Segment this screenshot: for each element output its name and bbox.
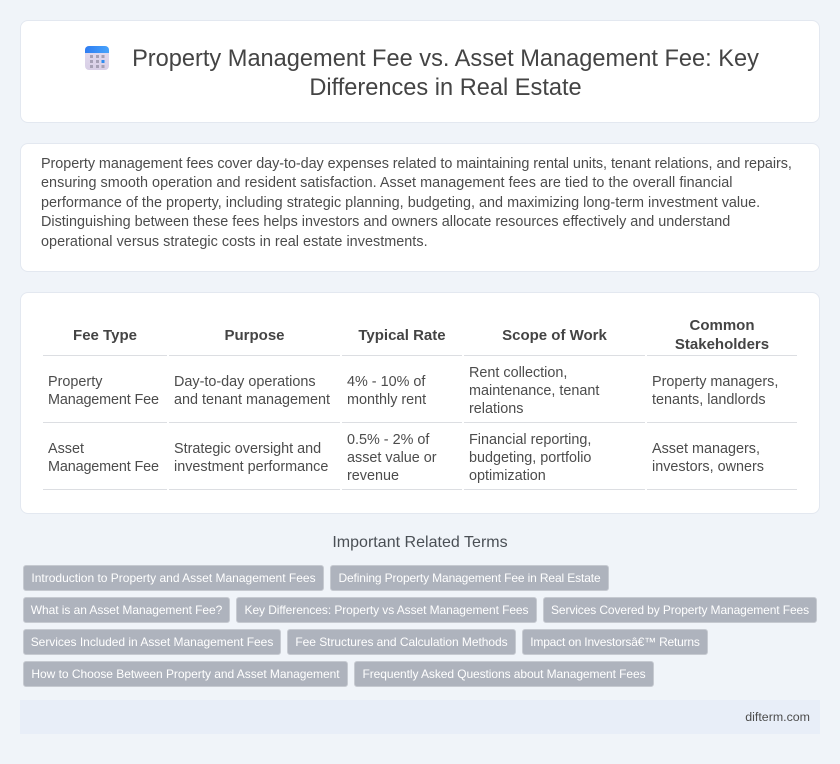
- footer brand: difterm.com: [745, 710, 810, 724]
- intro paragraph: operational versus strategic costs in real estate investments.: [41, 234, 428, 250]
- related terms tags: Key Differences: Property vs Asset Management Fees: [245, 603, 528, 617]
- table row: property management fee: Rent collection,: [469, 365, 567, 381]
- table row: asset management fee: revenue: [347, 468, 399, 484]
- table row: property management fee: tenants, landlords: [652, 392, 766, 408]
- related terms tags: Services Included in Asset Management Fees: [31, 635, 273, 649]
- table headers: Common: [690, 317, 754, 334]
- related terms tags: Defining Property Management Fee in Real Estate: [338, 571, 601, 585]
- table row: asset management fee: Asset: [48, 441, 84, 457]
- panel: comparison table: [20, 292, 820, 514]
- table row: asset management fee: investment performance: [174, 459, 328, 475]
- table row: property management fee: Property: [48, 374, 102, 390]
- table row: property management fee: Management Fee: [48, 392, 159, 408]
- table row: property management fee: and tenant management: [174, 392, 330, 408]
- panel: introduction text: [20, 143, 820, 272]
- related terms tags: Frequently Asked Questions about Management Fees: [362, 667, 646, 681]
- intro paragraph: Distinguishing between these fees helps investors and owners allocate resources effectively and understand: [41, 214, 730, 230]
- table row: asset management fee: [48, 432, 764, 484]
- table row: asset management fee: asset value or: [347, 450, 437, 466]
- table row: property management fee: [48, 365, 778, 417]
- table row: asset management fee: 0.5% - 2% of: [347, 432, 429, 448]
- intro paragraph: ensuring smooth operation and resident satisfaction. Asset management fees are tied to the overall financial: [41, 175, 732, 191]
- icon: calendar: [85, 46, 109, 70]
- table row: asset management fee: optimization: [469, 468, 546, 484]
- table row: property management fee: relations: [469, 401, 523, 417]
- table row: asset management fee: Asset managers,: [652, 441, 760, 457]
- related terms tags: [23, 565, 817, 687]
- related terms tags: Introduction to Property and Asset Management Fees: [31, 571, 316, 585]
- table row: property management fee: monthly rent: [347, 392, 426, 408]
- panel: title header: [20, 20, 820, 123]
- table row: asset management fee: Strategic oversight and: [174, 441, 321, 457]
- table row: property management fee: Property managers,: [652, 374, 778, 390]
- table headers: Stakeholders: [675, 336, 769, 353]
- footer: [20, 700, 820, 734]
- table row: property management fee: Day-to-day operations: [174, 374, 316, 390]
- related terms tags: What is an Asset Management Fee?: [31, 603, 222, 617]
- table row: property management fee: maintenance, tenant: [469, 383, 599, 399]
- intro paragraph: performance of the property, including strategic planning, budgeting, and maximizing long-term investment value.: [41, 195, 760, 211]
- table row: asset management fee: investors, owners: [652, 459, 764, 475]
- table row: property management fee: 4% - 10% of: [347, 374, 425, 390]
- related terms tags: Impact on Investorsâ€™ Returns: [530, 635, 700, 649]
- intro paragraph: Property management fees cover day-to-day expenses related to maintaining rental units, tenant relations, and repairs,: [41, 156, 792, 172]
- title: Differences in Real Estate: [309, 75, 582, 101]
- related terms tags: How to Choose Between Property and Asset Management: [31, 667, 340, 681]
- intro paragraph: [41, 156, 792, 250]
- table headers: Fee Type: [73, 327, 137, 344]
- table row: asset management fee: Financial reporting,: [469, 432, 591, 448]
- table row: asset management fee: Management Fee: [48, 459, 159, 475]
- title: Property Management Fee vs. Asset Management Fee: Key: [132, 46, 759, 72]
- related terms tags: Fee Structures and Calculation Methods: [295, 635, 508, 649]
- title: [132, 46, 759, 101]
- related terms tags: Services Covered by Property Management Fees: [551, 603, 809, 617]
- table row: asset management fee: budgeting, portfolio: [469, 450, 591, 466]
- related terms heading: Important Related Terms: [332, 534, 508, 551]
- table headers: Purpose: [224, 327, 284, 344]
- table headers: Typical Rate: [358, 327, 446, 344]
- table headers: [73, 317, 769, 353]
- table headers: Scope of Work: [502, 327, 607, 344]
